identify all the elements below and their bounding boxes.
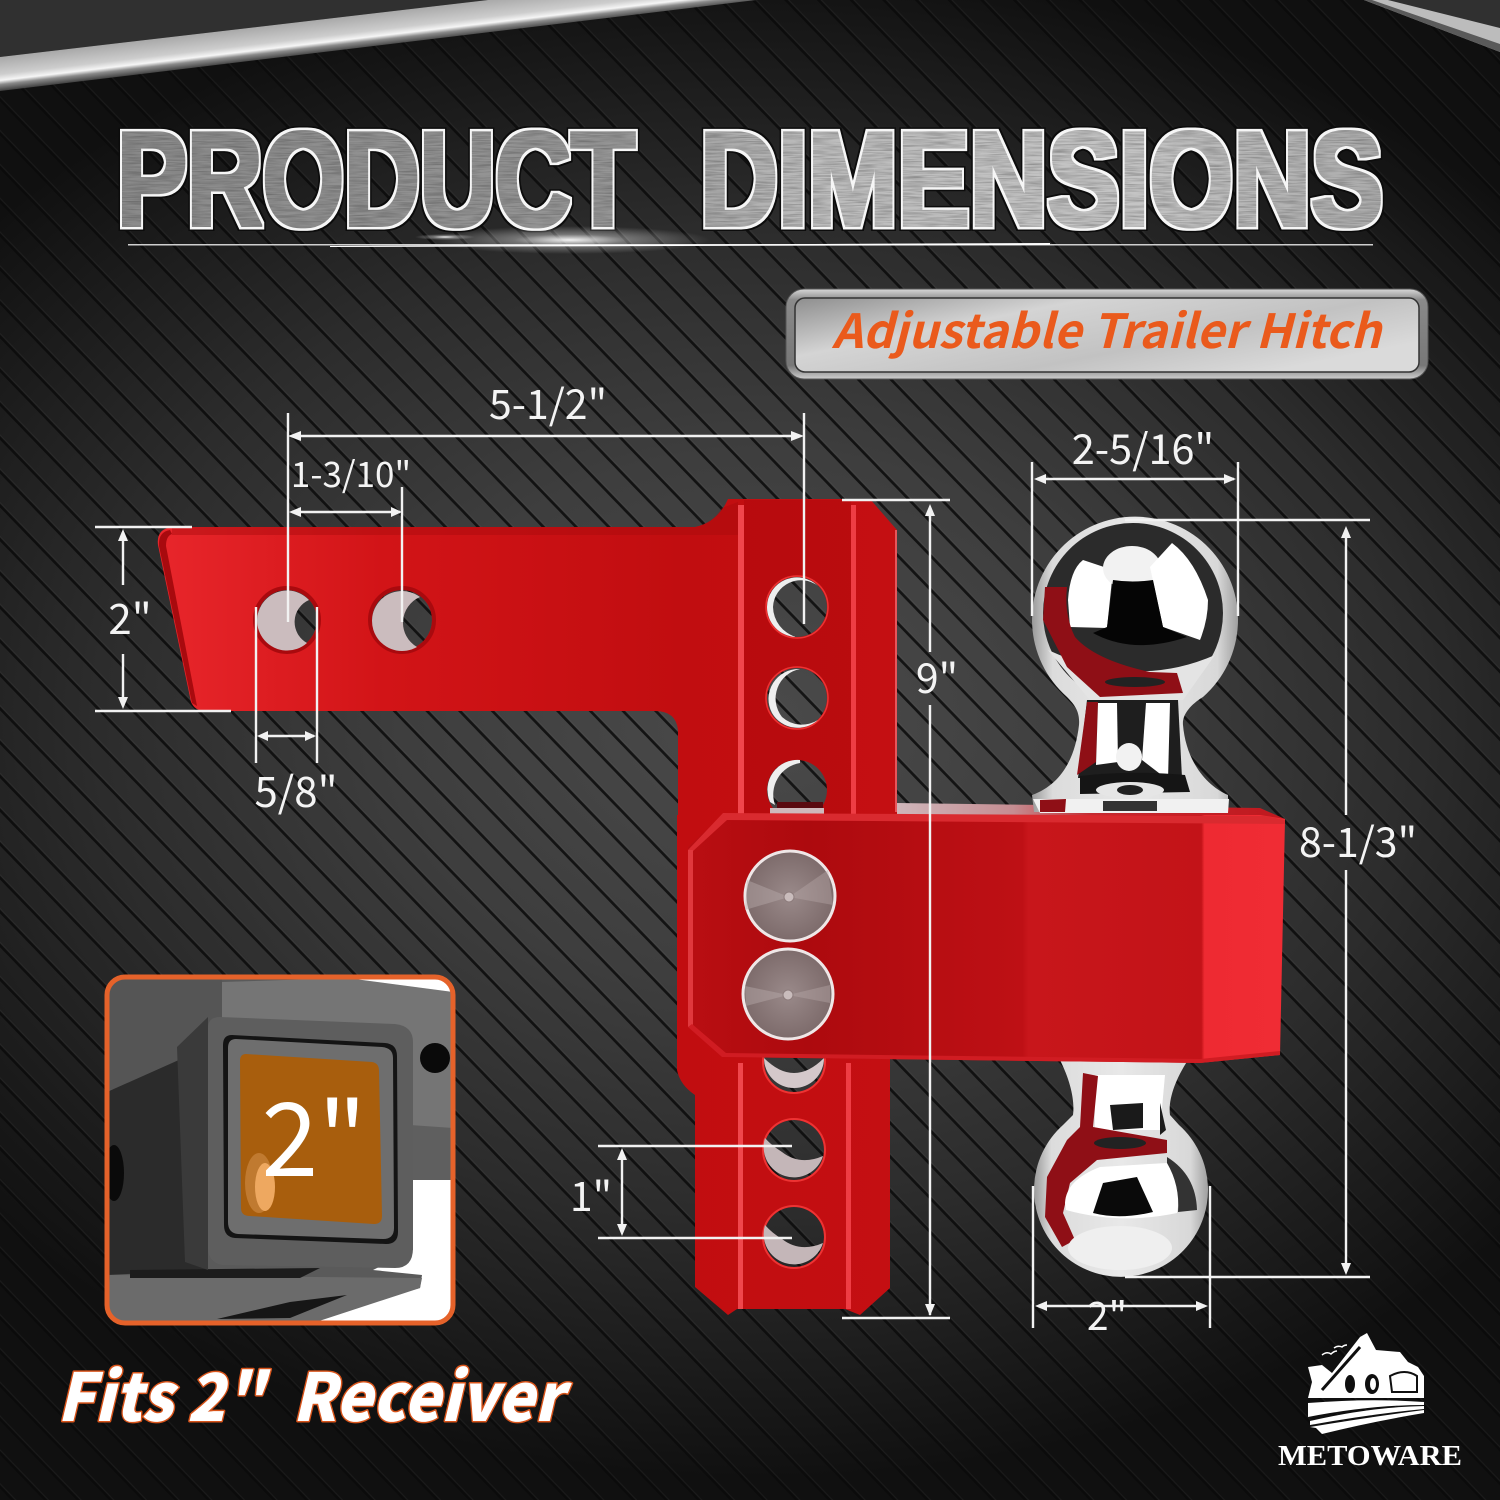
hole reflections	[257, 577, 824, 815]
dimension: 2" shank height	[95, 527, 231, 711]
badge: Adjustable Trailer Hitch: Adjustable Trailer Hitch	[831, 293, 1384, 362]
hitch: drop shank and upper plate with holes	[158, 499, 897, 820]
dimension: 2" shank height: 2"	[108, 586, 152, 647]
top-right chrome corner band	[1364, 0, 1500, 52]
inset: 2 inch receiver photo: 2"	[262, 1059, 366, 1206]
logo: METOWARE: METOWARE	[1278, 1440, 1462, 1472]
title: PRODUCT DIMENSIONS: PRODUCT	[117, 103, 635, 255]
shank edges, flange lines and hole rims	[159, 502, 897, 815]
dimension: 2" ball diameter	[1033, 1186, 1210, 1342]
dimension: 8-1/3": 8-1/3"	[1299, 809, 1417, 869]
dimension: 1-3/10"	[289, 447, 411, 622]
caption: Fits 2" Receiver: Fits 2" Receiver	[57, 1345, 573, 1441]
inset: 2 inch receiver photo	[104, 977, 453, 1323]
hitch: lower tow ball	[1034, 1060, 1208, 1277]
dimension: 1-3/10": 1-3/10"	[291, 447, 411, 498]
dimension: 8-1/3"	[1125, 520, 1417, 1277]
dimension: 2" ball diameter: 2"	[1087, 1286, 1127, 1342]
dimension: 5-1/2": 5-1/2"	[489, 371, 607, 431]
logo: METOWARE	[1278, 1333, 1462, 1472]
badge: Adjustable Trailer Hitch	[786, 289, 1428, 379]
hitch: ball mount receiver body	[688, 803, 1285, 1063]
dimension: 9": 9"	[916, 645, 958, 705]
title underline with glow	[128, 226, 1373, 254]
hitch: lower plate section	[677, 815, 890, 1315]
dimension: 2-5/16"	[1032, 416, 1238, 616]
hitch: locking pins	[743, 851, 835, 1039]
dimension: 5/8": 5/8"	[254, 759, 338, 820]
plate centre channel shading	[744, 500, 851, 820]
hitch: upper tow ball	[1032, 517, 1238, 813]
title: PRODUCT DIMENSIONS	[117, 103, 1383, 255]
dimension: 2-5/16": 2-5/16"	[1072, 416, 1214, 476]
dimension: 1" hole spacing	[570, 1146, 792, 1238]
dimension: 5-1/2"	[288, 371, 804, 624]
dimension: 1" hole spacing: 1"	[570, 1163, 612, 1223]
dimension: 9"	[842, 500, 958, 1318]
dimension: 5/8"	[254, 607, 338, 820]
top-left chrome corner band	[0, 0, 756, 91]
